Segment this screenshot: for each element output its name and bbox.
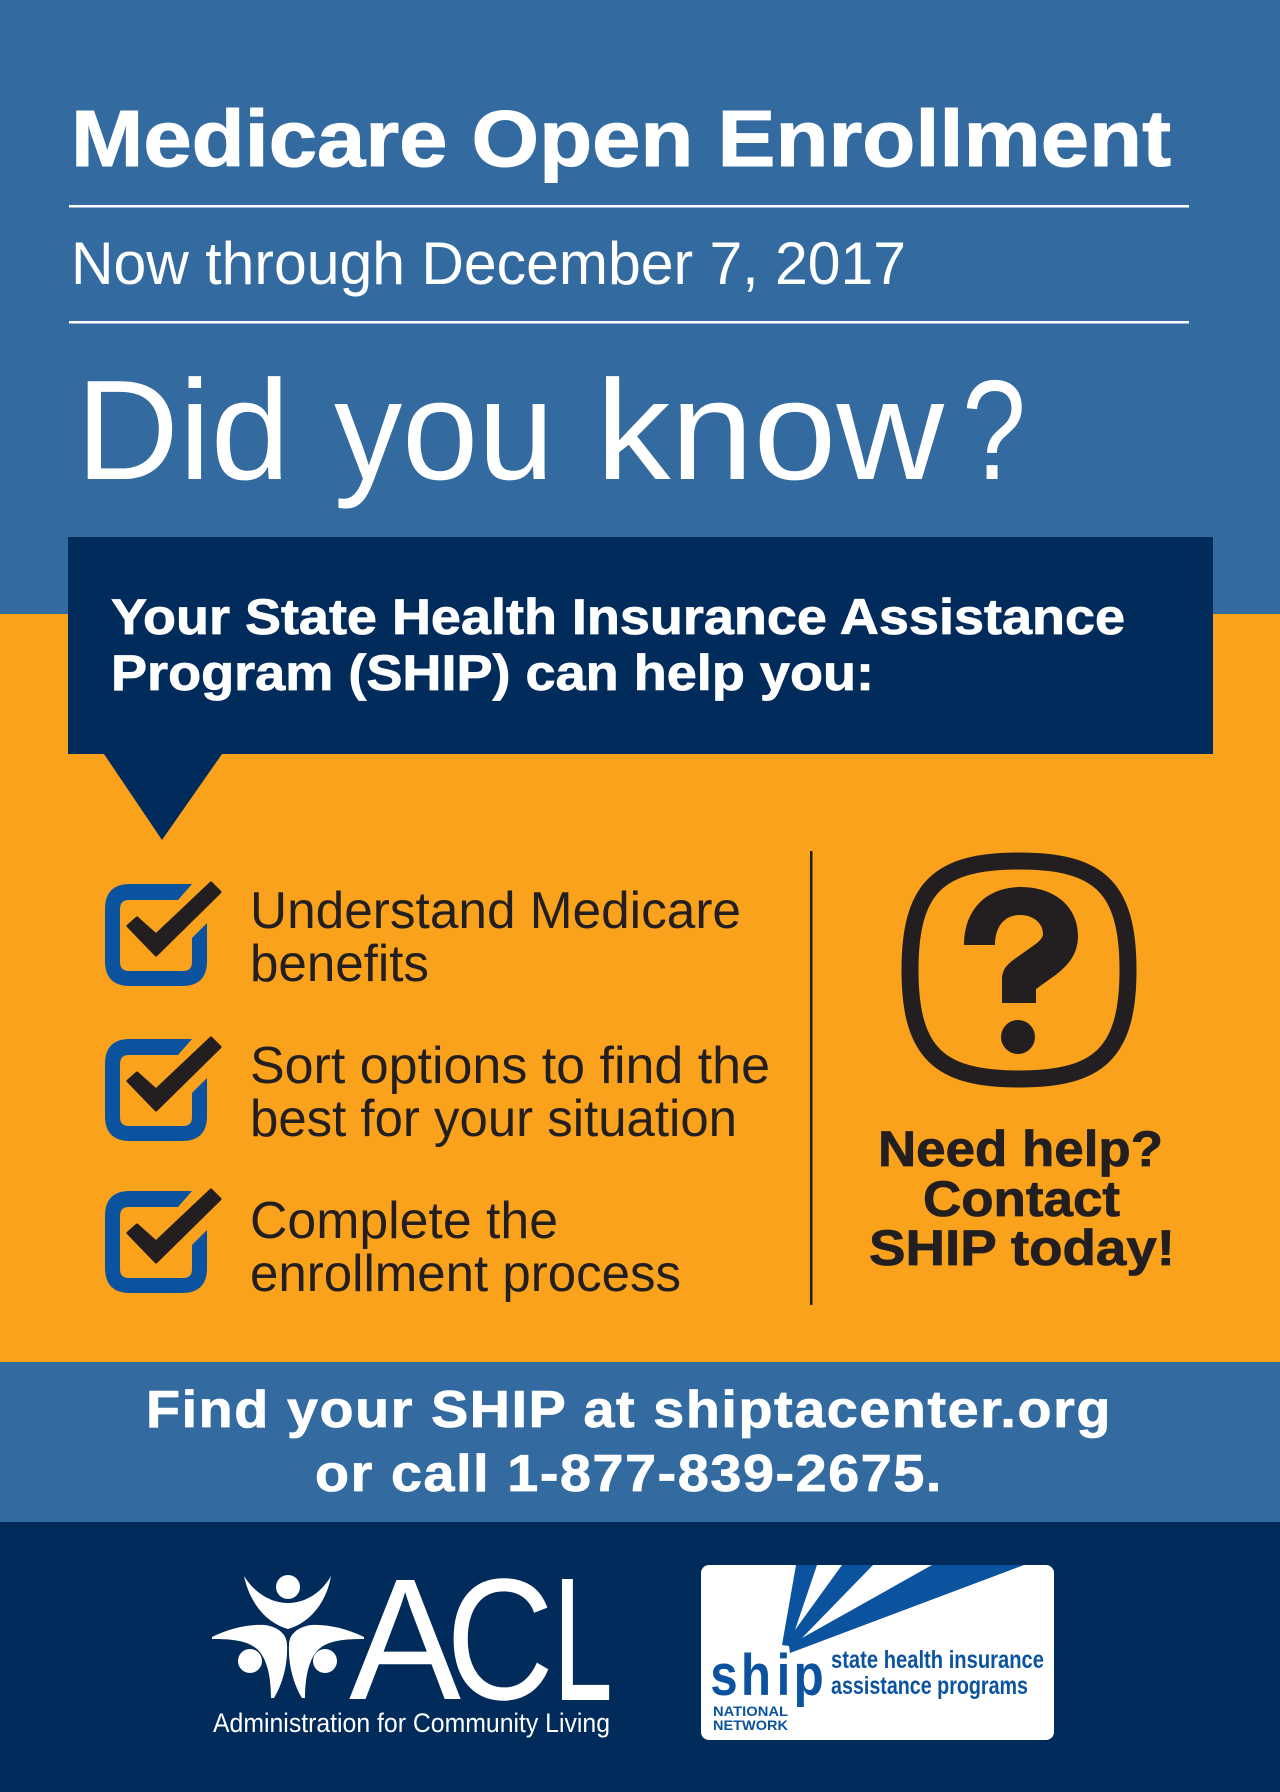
callout: SHIP speech box <box>68 537 1213 840</box>
panel: find your SHIP blue band <box>0 1362 1280 1522</box>
subtitle: dates: Now through December 7, 2017 <box>71 230 906 297</box>
text: find your SHIP <box>146 1381 1112 1503</box>
text: benefit 2 <box>250 1037 770 1148</box>
panel: navy footer <box>0 1522 1280 1792</box>
text: need help: Contact <box>923 1171 1120 1227</box>
logo: ACL: A <box>349 1542 462 1736</box>
panel: orange band <box>0 614 1280 1362</box>
logo: SHIP national network <box>701 1565 1054 1740</box>
text: benefit 1 <box>250 882 741 993</box>
logo: ACL <box>212 1542 612 1738</box>
heading: did you know: you <box>334 351 554 510</box>
text: benefit 3: Complete the <box>250 1192 558 1250</box>
icon: checkbox 1 <box>105 883 220 986</box>
text: benefit 2: best for your situation <box>250 1090 737 1148</box>
heading: did you know <box>76 351 1026 510</box>
panel: top blue band <box>0 0 1280 614</box>
logo: ACL: L <box>554 1542 612 1736</box>
text: benefit 3 <box>250 1192 681 1303</box>
text: find your SHIP: or call 1-877-839-2675. <box>315 1445 943 1503</box>
text: need help: Need help? <box>878 1121 1163 1177</box>
logo: SHIP national network: assistance programs <box>831 1672 1028 1700</box>
text: benefit 2: Sort options to find the <box>250 1037 770 1095</box>
icon: question mark <box>910 861 1128 1079</box>
logo: SHIP national network: NATIONAL <box>713 1703 788 1719</box>
text: benefit 1: Understand Medicare <box>250 882 741 940</box>
icon: checkbox 3 <box>105 1190 220 1293</box>
logo: ACL: Administration for Community Living <box>213 1708 610 1738</box>
title: Medicare Open Enrollment <box>71 94 1171 183</box>
heading: did you know: Did <box>76 351 290 510</box>
icon: checkbox 2 <box>105 1038 220 1141</box>
heading: did you know: ? <box>962 351 1026 510</box>
logo: SHIP national network: NETWORK <box>713 1717 788 1733</box>
callout: SHIP speech box: Program (SHIP) can help you: <box>111 645 874 701</box>
heading: did you know: know <box>596 351 944 510</box>
text: need help: SHIP today! <box>869 1220 1175 1276</box>
text: find your SHIP: Find your SHIP at shiptacenter.org <box>146 1381 1112 1439</box>
logo: SHIP national network: ship <box>710 1643 824 1708</box>
logo: ACL: C <box>446 1542 554 1736</box>
text: benefit 3: enrollment process <box>250 1245 681 1303</box>
callout: SHIP speech box: Your State Health Insurance Assistance <box>111 589 1125 645</box>
text: need help <box>869 1121 1175 1276</box>
text: benefit 1: benefits <box>250 935 429 993</box>
logo: SHIP national network: state health insurance <box>831 1646 1044 1674</box>
